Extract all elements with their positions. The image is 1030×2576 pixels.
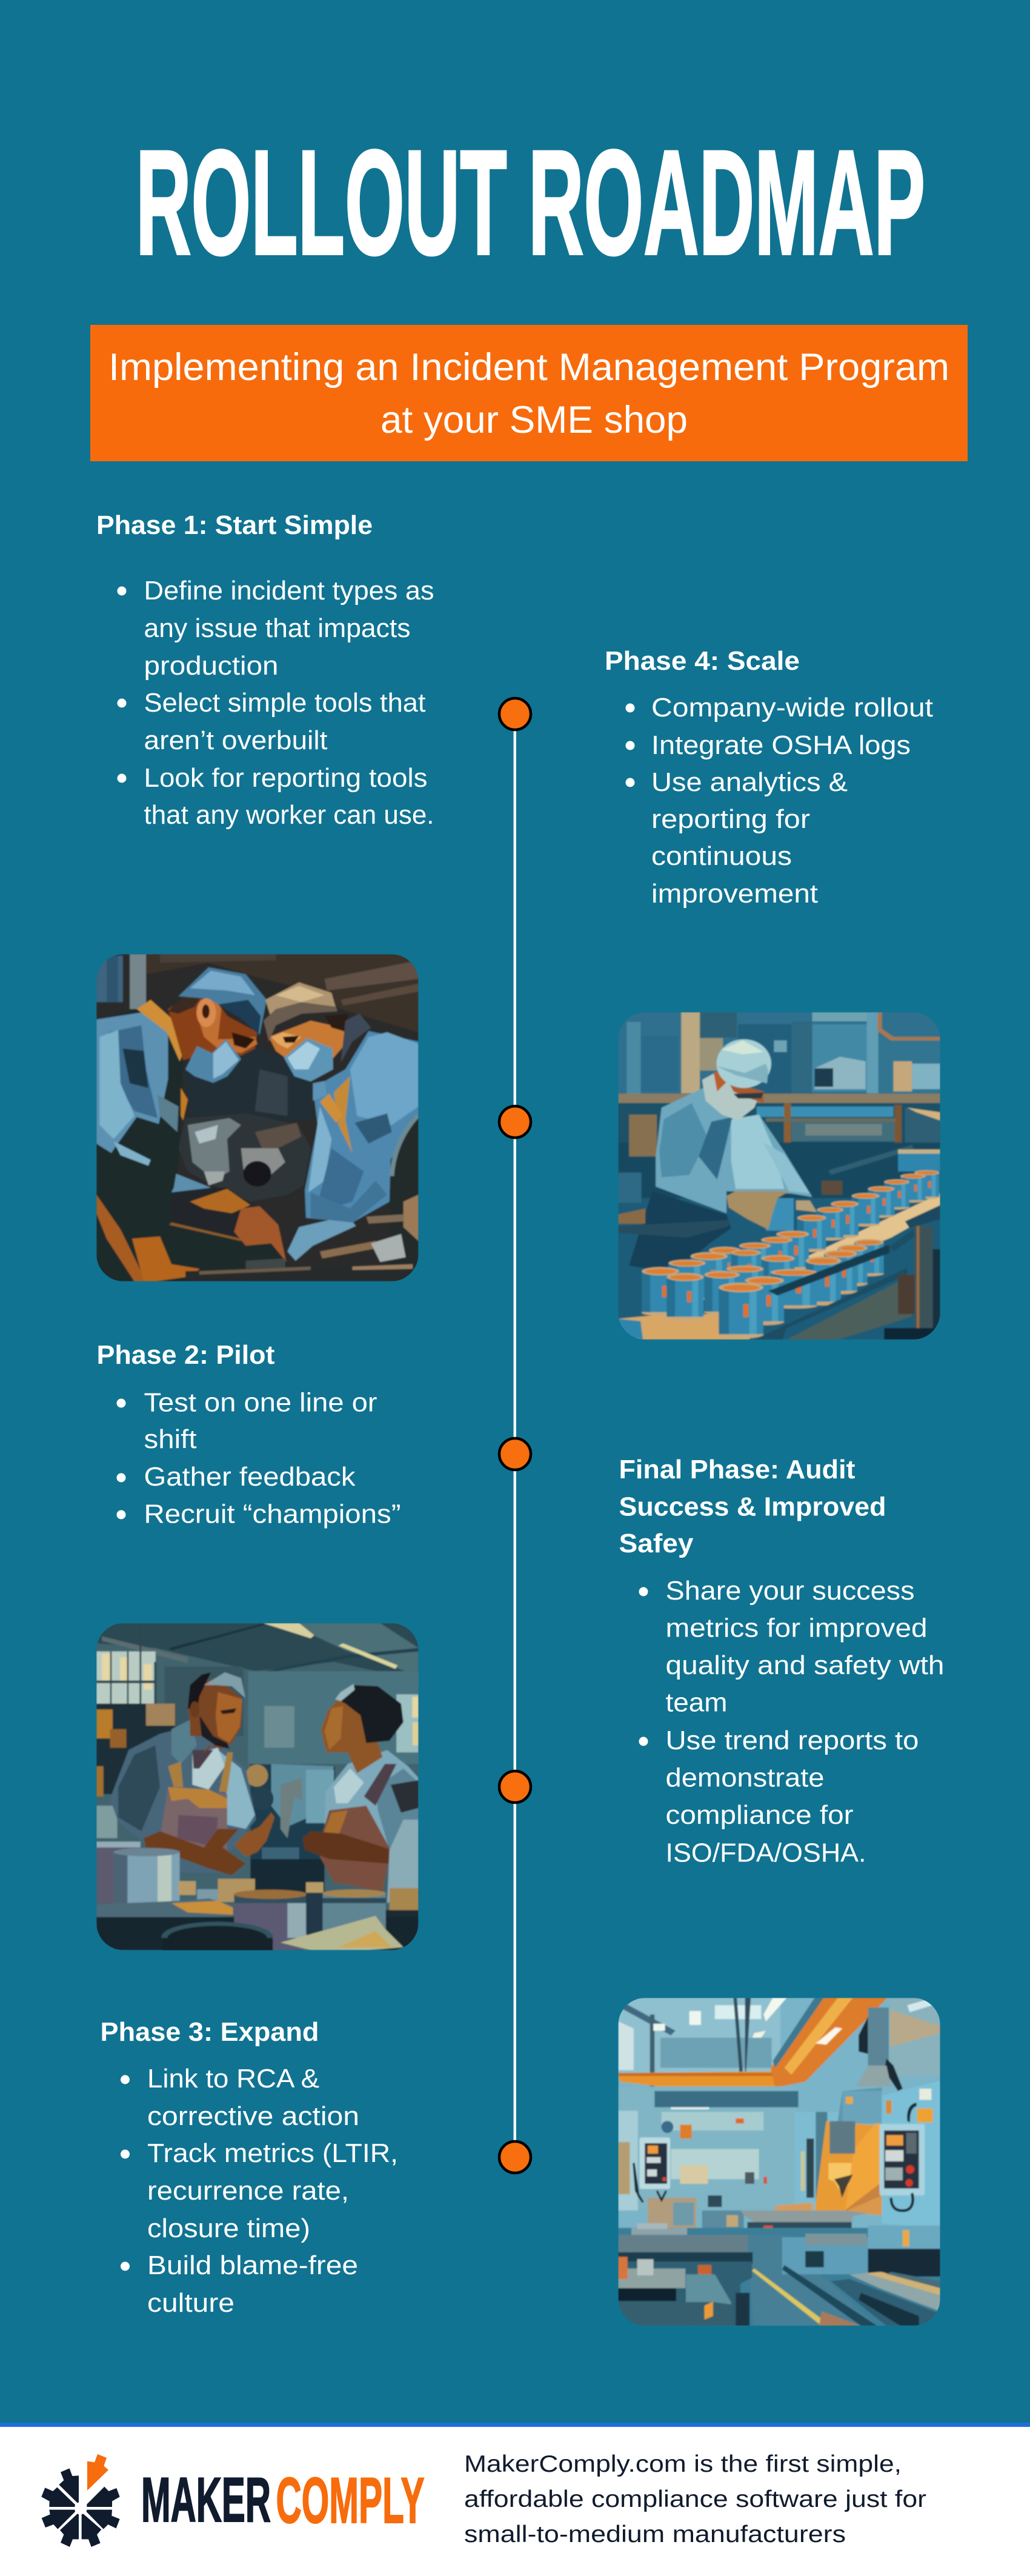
bullet list: Final Phase bbox=[639, 1576, 944, 1868]
bullet list: Phase 4: Use analytics & bbox=[651, 767, 848, 797]
subtitle banner bbox=[90, 325, 968, 461]
footer text: MakerComply.com is the first simple, bbox=[464, 2451, 902, 2477]
bullet list: Final Phase: demonstrate bbox=[665, 1763, 824, 1793]
icon: gear with orange segment bbox=[41, 2454, 120, 2547]
left panel bbox=[639, 2137, 670, 2189]
bullet list: Final Phase: ISO/FDA/OSHA. bbox=[665, 1838, 866, 1868]
bullet list: Phase 4: continuous bbox=[651, 841, 792, 871]
footer text: small-to-medium manufacturers bbox=[464, 2521, 846, 2548]
heading: Final Phase bbox=[619, 1455, 886, 1558]
duct and upper right bbox=[890, 1998, 940, 2077]
cans and table bbox=[96, 1847, 135, 1903]
heading: Final Phase: Safey bbox=[619, 1529, 694, 1558]
left worker bbox=[96, 1009, 287, 1281]
woman bbox=[325, 1750, 419, 1852]
machine bbox=[179, 1113, 311, 1201]
mid-ground bbox=[649, 2085, 780, 2141]
bottom-left machines bbox=[618, 2235, 748, 2252]
panel: Final Phase bbox=[619, 1455, 944, 1868]
heading: Final Phase: Success & Improved bbox=[619, 1492, 886, 1521]
bullet list: Phase 1: aren’t overbuilt bbox=[144, 726, 327, 755]
machine bbox=[250, 1764, 335, 1864]
bullet list: Phase 4: Integrate OSHA logs bbox=[651, 730, 911, 760]
floor under cans bbox=[618, 1314, 749, 1340]
bullet list: Final Phase: team bbox=[665, 1687, 727, 1718]
bullet list: Phase 3: recurrence rate, bbox=[147, 2176, 349, 2206]
bullet list: Final Phase: metrics for improved bbox=[665, 1613, 927, 1643]
panel: Phase 4 bbox=[605, 646, 933, 909]
floor bbox=[618, 2228, 940, 2326]
bullet list: Phase 1 bbox=[118, 576, 434, 830]
panel: Phase 2 bbox=[97, 1340, 401, 1529]
bullet list: Phase 3 bbox=[121, 2064, 398, 2318]
bullet list: Phase 1: that any worker can use. bbox=[144, 800, 434, 830]
bullet list: Phase 4: Company-wide rollout bbox=[651, 693, 933, 722]
timeline node 3 bbox=[499, 1438, 531, 1470]
panel: Phase 1 bbox=[96, 510, 434, 830]
panel: Phase 3 bbox=[101, 2017, 398, 2318]
bullet list: Final Phase: quality and safety wth bbox=[665, 1650, 944, 1680]
heading: Final Phase: Final Phase: Audit bbox=[619, 1455, 856, 1484]
bullet list: Phase 1: any issue that impacts bbox=[144, 613, 411, 643]
man bbox=[110, 1727, 256, 1873]
timeline bbox=[499, 698, 531, 2173]
bullet list: Phase 1: Look for reporting tools bbox=[144, 763, 428, 793]
arm and gloves bbox=[221, 1188, 235, 1194]
illustration: modern CNC factory floor bbox=[618, 1996, 940, 2326]
row of cans on belt bbox=[808, 1193, 940, 1260]
logo: MakerComply bbox=[41, 2454, 425, 2547]
central machine bbox=[795, 2112, 839, 2211]
illustration: two masked workers at a machine bbox=[96, 954, 419, 1281]
bullet list: Phase 1: Select simple tools that bbox=[144, 688, 425, 718]
glove and held can bbox=[766, 1198, 794, 1230]
wordmark: COMPLY bbox=[276, 2464, 424, 2537]
bullet list: Phase 3: Build blame-free bbox=[147, 2251, 358, 2280]
heading: Phase 4: Phase 4: Scale bbox=[605, 646, 800, 676]
bullet list: Phase 4: improvement bbox=[651, 879, 818, 909]
subtitle banner: Implementing an Incident Management Program bbox=[108, 346, 949, 389]
bullet list: Phase 3: culture bbox=[147, 2288, 234, 2318]
heading: Phase 3: Phase 3: Expand bbox=[101, 2017, 319, 2047]
timeline node 5 bbox=[499, 2141, 531, 2173]
illustration: worker inspecting cans on a conveyor bbox=[618, 1012, 940, 1340]
bullet list: Phase 1: production bbox=[144, 651, 279, 681]
illustration: two workers talking in a workshop bbox=[96, 1623, 420, 1952]
subtitle banner: at your SME shop bbox=[380, 399, 688, 441]
timeline node 1 bbox=[499, 698, 531, 730]
bullet list: Phase 3: Link to RCA & bbox=[147, 2064, 319, 2094]
bullet list: Phase 2: Gather feedback bbox=[144, 1462, 356, 1492]
front cans bbox=[776, 1231, 809, 1270]
bullet list: Phase 3: corrective action bbox=[147, 2101, 359, 2131]
right machine bbox=[882, 2081, 940, 2229]
bullet list: Phase 1: Define incident types as bbox=[144, 576, 434, 606]
bullet list: Final Phase: compliance for bbox=[665, 1800, 853, 1830]
bench bbox=[184, 1270, 259, 1281]
worker bbox=[629, 1191, 731, 1270]
bullet list: Phase 3: closure time) bbox=[147, 2214, 310, 2243]
table bbox=[740, 2211, 882, 2222]
orange beams bbox=[618, 2071, 775, 2089]
lower belt and frame bbox=[768, 1244, 890, 1296]
heading: Phase 1: Phase 1: Start Simple bbox=[96, 510, 373, 540]
timeline node 4 bbox=[499, 1771, 531, 1803]
bullet list: Phase 2 bbox=[116, 1388, 401, 1529]
bullet list: Phase 3: Track metrics (LTIR, bbox=[147, 2138, 398, 2168]
bullet list: Phase 2: shift bbox=[144, 1424, 196, 1454]
footer text bbox=[464, 2451, 926, 2548]
right bottom machines bbox=[782, 2237, 868, 2274]
bullet list: Phase 2: Test on one line or bbox=[144, 1388, 377, 1417]
bullet list: Phase 4 bbox=[625, 693, 933, 909]
bullet list: Final Phase: Use trend reports to bbox=[665, 1726, 919, 1755]
footer bbox=[0, 2423, 1030, 2576]
right worker bbox=[305, 1031, 419, 1223]
bullet list: Phase 2: Recruit “champions” bbox=[144, 1500, 401, 1529]
footer text: affordable compliance software just for bbox=[464, 2486, 926, 2512]
bullet list: Final Phase: Share your success bbox=[665, 1576, 915, 1606]
timeline node 2 bbox=[499, 1106, 531, 1138]
heading: Phase 2: Phase 2: Pilot bbox=[97, 1340, 275, 1370]
bullet list: Phase 4: reporting for bbox=[651, 804, 810, 834]
wordmark: MAKER bbox=[141, 2465, 271, 2535]
